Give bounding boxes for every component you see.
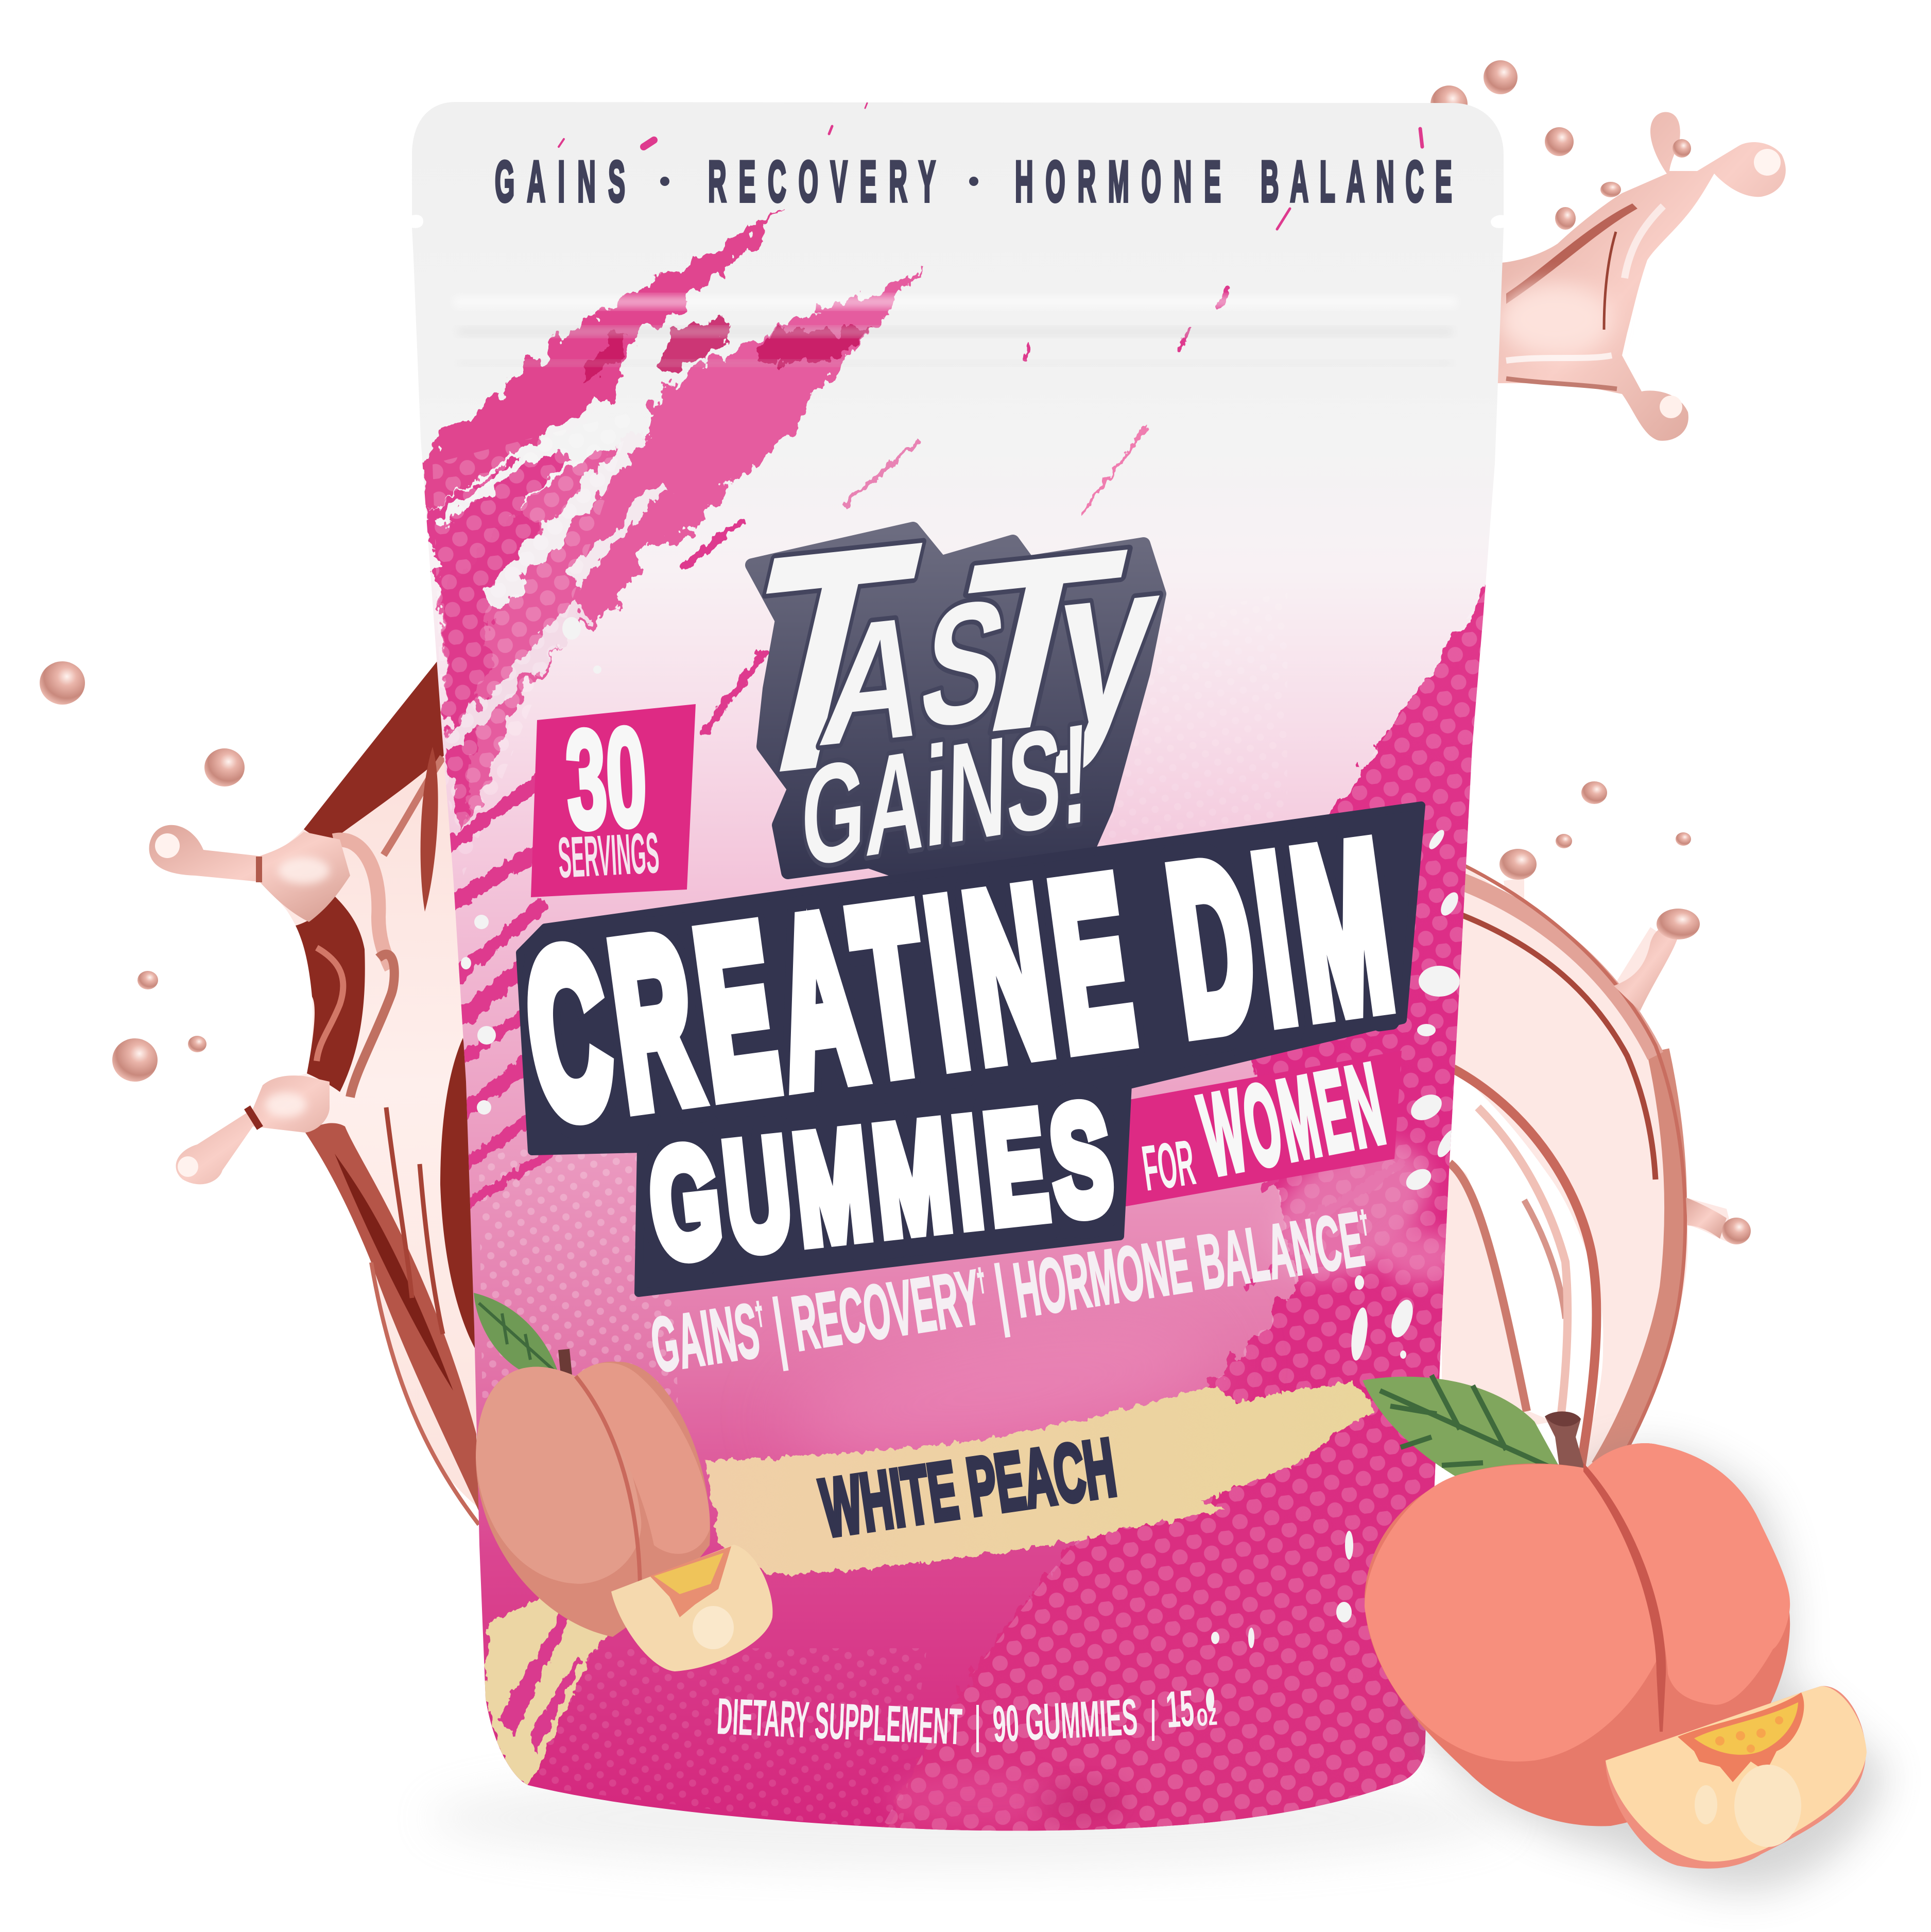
halftone dots	[433, 412, 1504, 1839]
peach shadow	[1411, 1449, 1885, 1890]
pouch body	[412, 102, 1504, 1831]
small peach on pouch	[474, 1293, 772, 1671]
brand logo: T	[705, 473, 941, 845]
brand logo	[705, 473, 1171, 896]
product pouch: WOMEN	[1192, 1039, 1395, 1200]
left brush streaks	[421, 212, 918, 834]
splash droplets	[1430, 60, 1691, 230]
small peach slice	[611, 1545, 772, 1671]
product title: gummies	[643, 1071, 1127, 1291]
peach right lobe	[1587, 1443, 1790, 1705]
splash arm heads	[1499, 849, 1751, 1244]
peach seam	[1585, 1467, 1664, 1732]
pale pink wash near the tagline	[1245, 1114, 1453, 1307]
peach left lobe	[1365, 1464, 1659, 1762]
lower splash arm	[176, 1075, 330, 1184]
pouch highlights	[453, 296, 1462, 1826]
small pink ticks near the tagline	[559, 103, 1422, 229]
flavour name: WHITE PEACH	[816, 1422, 1121, 1554]
left liquid splash	[40, 654, 494, 1525]
bottom product details: oz	[1195, 1696, 1218, 1733]
bottom product details	[716, 1679, 1218, 1756]
peach slice	[1606, 1686, 1867, 1869]
large peach	[1363, 1375, 1885, 1890]
servings badge: 30	[562, 699, 650, 858]
upper right liquid splash	[1430, 60, 1786, 441]
product pouch: | HORMONE BALANCE	[981, 1195, 1369, 1339]
brand logo: S	[910, 562, 1017, 764]
servings badge	[531, 699, 696, 897]
white paint splatter	[461, 617, 1462, 1711]
benefits line: †	[975, 1262, 988, 1297]
for women band	[1115, 1039, 1402, 1208]
upper splash arm	[149, 825, 350, 922]
bottom product details: DIETARY SUPPLEMENT	[716, 1687, 963, 1756]
ground shadow	[427, 1767, 1509, 1870]
brand logo: y	[1045, 509, 1171, 778]
brand logo: T	[920, 495, 1143, 791]
bottom product details: 90 GUMMIES	[991, 1688, 1139, 1753]
for women band: FOR	[1138, 1126, 1199, 1205]
benefits line: †	[1357, 1204, 1370, 1240]
peach body	[1365, 1443, 1790, 1826]
product title: creatine dim	[513, 793, 1421, 1293]
cream flavour brush	[704, 1382, 1377, 1576]
top tagline: GAINS	[495, 150, 625, 214]
lower right liquid splash	[1442, 781, 1751, 1468]
small leaf	[474, 1293, 559, 1374]
splash droplets	[40, 661, 245, 1082]
top tagline: RECOVERY	[708, 150, 936, 214]
brand logo: A	[811, 579, 938, 783]
product pouch: SERVINGS	[557, 820, 661, 890]
benefits line: GAINS	[646, 1266, 901, 1389]
top tagline: BALANCE	[1261, 150, 1452, 214]
product title: gummies: GUMMIES	[643, 1071, 1127, 1291]
top tagline: HORMONE	[1015, 150, 1221, 214]
bottom product details: 15	[1164, 1679, 1196, 1739]
big leaf	[1363, 1375, 1563, 1483]
pouch artwork	[421, 103, 1504, 1839]
product pouch	[412, 102, 1504, 1839]
diagonal pink strokes	[444, 288, 1401, 1288]
benefits line: | RECOVERY	[759, 1253, 986, 1372]
splash droplets	[1556, 781, 1691, 848]
cream brush stripes lower left	[486, 1566, 633, 1787]
top tagline	[495, 150, 1452, 214]
product title: gummies: GUMMIES	[643, 1071, 1127, 1291]
right pink field	[875, 567, 1504, 1839]
peach stem	[1545, 1411, 1586, 1473]
benefits line: †	[753, 1296, 766, 1331]
brand logo: GAiNS!	[800, 693, 1090, 896]
slice pit	[1678, 1692, 1804, 1782]
